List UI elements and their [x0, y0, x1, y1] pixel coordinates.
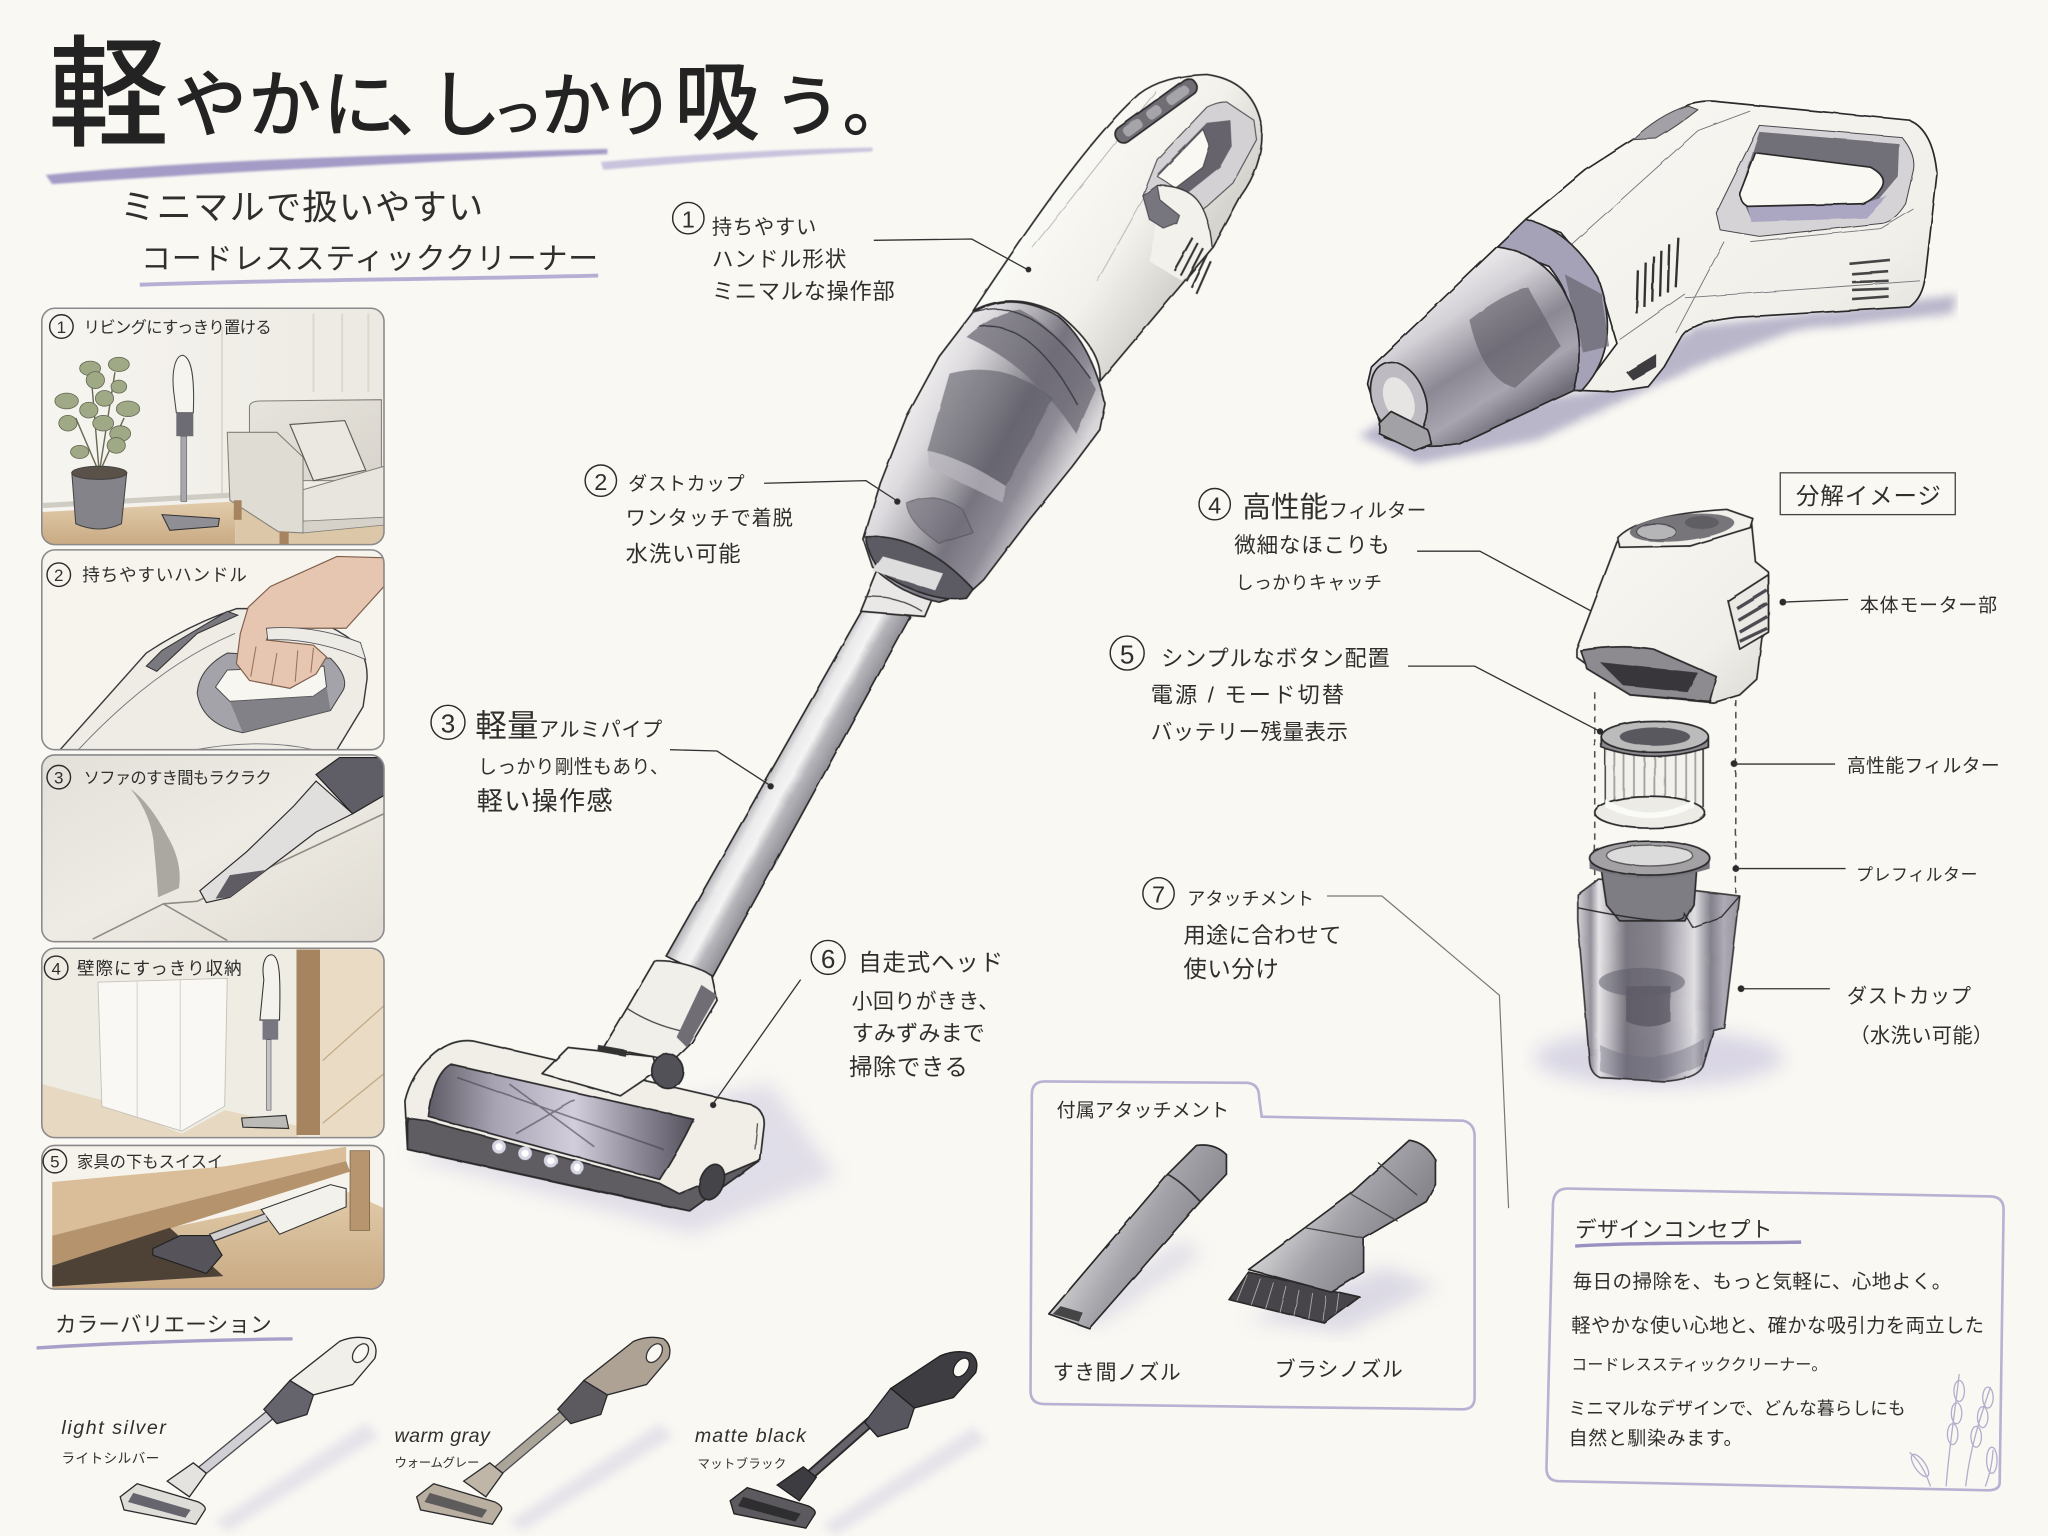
- brush nozzle: [1229, 1140, 1437, 1332]
- exploded labels: （水洗い可能）: [1849, 1024, 1993, 1047]
- title brush underline: [46, 148, 872, 184]
- neck: [603, 961, 717, 1061]
- panel 3: sofa gap: ソファのすき間もラクラク: [84, 770, 272, 788]
- callout 3: aluminium pipe: 3: [441, 709, 455, 739]
- title: か: [541, 67, 611, 146]
- callout 4: filter: 4: [1208, 492, 1221, 518]
- handle recess: [1716, 125, 1914, 236]
- transparent cone: [1368, 247, 1579, 446]
- head shadow: [408, 1084, 836, 1234]
- heading: colour variations: [37, 1312, 293, 1348]
- callout 6: self-propelled head: すみずみまで: [852, 1021, 985, 1046]
- connector: [861, 556, 943, 616]
- exploded labels: ダストカップ: [1847, 985, 1971, 1008]
- exploded labels: プレフィルター: [1856, 865, 1977, 884]
- callout 1: handle: 1: [682, 206, 695, 232]
- exploded view title box: [1780, 473, 1955, 515]
- colour variant: warm gray: ウォームグレー: [394, 1456, 479, 1470]
- callout 7: attachments: 使い分け: [1183, 956, 1279, 982]
- callout 2: dust cup: [585, 465, 896, 567]
- panel 4: wall storage: [42, 948, 384, 1138]
- callout 2: dust cup: 2: [594, 469, 607, 495]
- panel 1: living room: リビングにすっきり置ける: [84, 319, 272, 337]
- panel: attachments: 付属アタッチメント: [1057, 1100, 1229, 1122]
- dust cup: [863, 302, 1105, 602]
- lavender sprig: [1908, 1374, 1997, 1486]
- exploded labels: 高性能フィルター: [1847, 755, 2000, 777]
- callout 1: handle: [673, 202, 1027, 304]
- main stick vacuum illustration: [405, 74, 1262, 1234]
- title: やかに、し: [174, 66, 502, 147]
- callout 4: filter: 高性能フィルター: [1242, 492, 1426, 524]
- callout 6: self-propelled head: 自走式ヘッド: [858, 949, 1003, 975]
- heading: colour variations: カラーバリエーション: [55, 1312, 272, 1337]
- panel: design concept: [1546, 1189, 2004, 1490]
- panel 2: handle: 持ちやすいハンドル: [82, 565, 247, 585]
- panel 4: wall storage: 4: [51, 959, 61, 978]
- panel 5: under furniture: 家具の下もスイスイ: [77, 1154, 223, 1172]
- colour variant: light silver: [61, 1337, 379, 1531]
- exploded labels: [1735, 594, 2000, 1047]
- pipe: [666, 603, 910, 978]
- shadow: [1360, 295, 1957, 464]
- callout 5: buttons: 電源 / モード切替: [1151, 683, 1344, 708]
- panel 3: sofa gap: [42, 755, 384, 942]
- callout 7: attachments: 用途に合わせて: [1183, 923, 1341, 948]
- colour variant: matte black: matte black: [695, 1425, 807, 1447]
- panel: attachments: すき間ノズル: [1053, 1361, 1181, 1384]
- vents: [1174, 238, 1211, 294]
- panel: design concept: ミニマルなデザインで、どんな暮らしにも: [1569, 1399, 1906, 1419]
- dust cup and prefilter: [1578, 841, 1740, 1081]
- panel: design concept: 毎日の掃除を、もっと気軽に、心地よく。: [1573, 1271, 1951, 1293]
- colour variant: warm gray: [394, 1337, 673, 1531]
- callout 1: handle: 持ちやすい: [712, 216, 816, 239]
- panel 5: under furniture: [42, 1145, 384, 1289]
- crevice nozzle: [1049, 1145, 1226, 1328]
- panel 5: under furniture: 5: [50, 1153, 60, 1172]
- callout dots: [710, 266, 1031, 1108]
- colour variant: light silver: light silver: [61, 1417, 167, 1439]
- subtitle: [120, 188, 598, 285]
- panel 1: living room: [42, 308, 384, 546]
- colour variant: warm gray: warm gray: [394, 1425, 491, 1447]
- callout 3: aluminium pipe: 軽い操作感: [477, 786, 613, 816]
- title: り: [609, 72, 674, 145]
- body recess lines: [1567, 111, 1920, 340]
- head: [405, 1041, 764, 1211]
- side slot: [1626, 354, 1656, 380]
- exploded labels: 本体モーター部: [1860, 594, 1997, 616]
- title: 軽: [48, 28, 168, 162]
- dust cup ring: [1497, 219, 1607, 391]
- panel 1: living room: 1: [57, 318, 66, 337]
- cup shadow: [1535, 1029, 1783, 1087]
- dashed guides: [1595, 692, 1736, 893]
- panel: design concept: デザインコンセプト: [1575, 1217, 1772, 1242]
- panel: attachments: [1031, 1081, 1475, 1409]
- HEPA filter: [1595, 721, 1708, 828]
- callout 5: buttons: シンプルなボタン配置: [1161, 646, 1390, 671]
- colour variant: matte black: [695, 1352, 986, 1535]
- panel: design concept: コードレススティッククリーナー。: [1571, 1356, 1827, 1374]
- panel 3: sofa gap: 3: [54, 769, 63, 788]
- exploded view: [1535, 509, 1786, 1087]
- panel: design concept: 自然と馴染みます。: [1569, 1428, 1742, 1450]
- callout 2: dust cup: ダストカップ: [628, 473, 745, 495]
- colour variant: light silver: ライトシルバー: [61, 1451, 159, 1466]
- callout 3: aluminium pipe: [431, 705, 769, 816]
- motor unit: [1576, 509, 1768, 703]
- handheld vacuum illustration: [1360, 101, 1957, 464]
- title: う。: [773, 71, 910, 146]
- callout 3: aluminium pipe: しっかり剛性もあり、: [478, 756, 669, 778]
- buttons: [1112, 76, 1200, 146]
- callout 7: attachments: [1143, 878, 1509, 1208]
- subtitle: ミニマルで扱いやすい: [120, 188, 483, 227]
- callout 3: aluminium pipe: 軽量アルミパイプ: [475, 709, 662, 744]
- exploded dots: [1731, 599, 1786, 992]
- callout 5: buttons: バッテリー残量表示: [1151, 719, 1348, 744]
- callout 7: attachments: アタッチメント: [1187, 889, 1314, 909]
- callout 4: filter: しっかりキャッチ: [1236, 573, 1382, 593]
- panel: design concept: 軽やかな使い心地と、確かな吸引力を両立した: [1571, 1315, 1984, 1337]
- callout 2: dust cup: ワンタッチで着脱: [626, 507, 793, 530]
- panel 4: wall storage: 壁際にすっきり収納: [77, 958, 242, 978]
- title: 吸: [674, 56, 760, 152]
- top buttons: [1633, 106, 1698, 140]
- callout 6: self-propelled head: 小回りがきき、: [852, 990, 999, 1013]
- panel 2: handle: 2: [54, 566, 63, 585]
- callout 6: self-propelled head: [713, 940, 1003, 1104]
- callout 5: buttons: 5: [1120, 640, 1134, 670]
- panel: attachments: ブラシノズル: [1275, 1359, 1403, 1382]
- colour variant: matte black: マットブラック: [697, 1456, 786, 1471]
- inner cylinder: [927, 370, 1053, 486]
- callout 6: self-propelled head: 6: [821, 944, 835, 974]
- handle opening: [1143, 102, 1256, 229]
- callout 5: buttons: [1110, 636, 1603, 744]
- callout 4: filter: [1199, 488, 1604, 620]
- subtitle: コードレススティッククリーナー: [141, 243, 598, 276]
- callout 1: handle: ハンドル形状: [712, 246, 846, 271]
- callout 2: dust cup: 水洗い可能: [626, 542, 741, 567]
- callout 1: handle: ミニマルな操作部: [712, 279, 895, 304]
- panel: usage scenes: [42, 308, 384, 1289]
- title: っ: [491, 85, 543, 143]
- panel 2: handle: [42, 550, 384, 750]
- dark band: [967, 310, 1096, 434]
- exploded view title box: 分解イメージ: [1796, 483, 1941, 509]
- callout 4: filter: 微細なほこりも: [1234, 532, 1390, 557]
- motor body: [1526, 101, 1937, 392]
- callout 7: attachments: 7: [1152, 882, 1165, 908]
- vents: [1637, 238, 1678, 313]
- motor body and handle: [973, 74, 1262, 381]
- callout 6: self-propelled head: 掃除できる: [849, 1054, 968, 1080]
